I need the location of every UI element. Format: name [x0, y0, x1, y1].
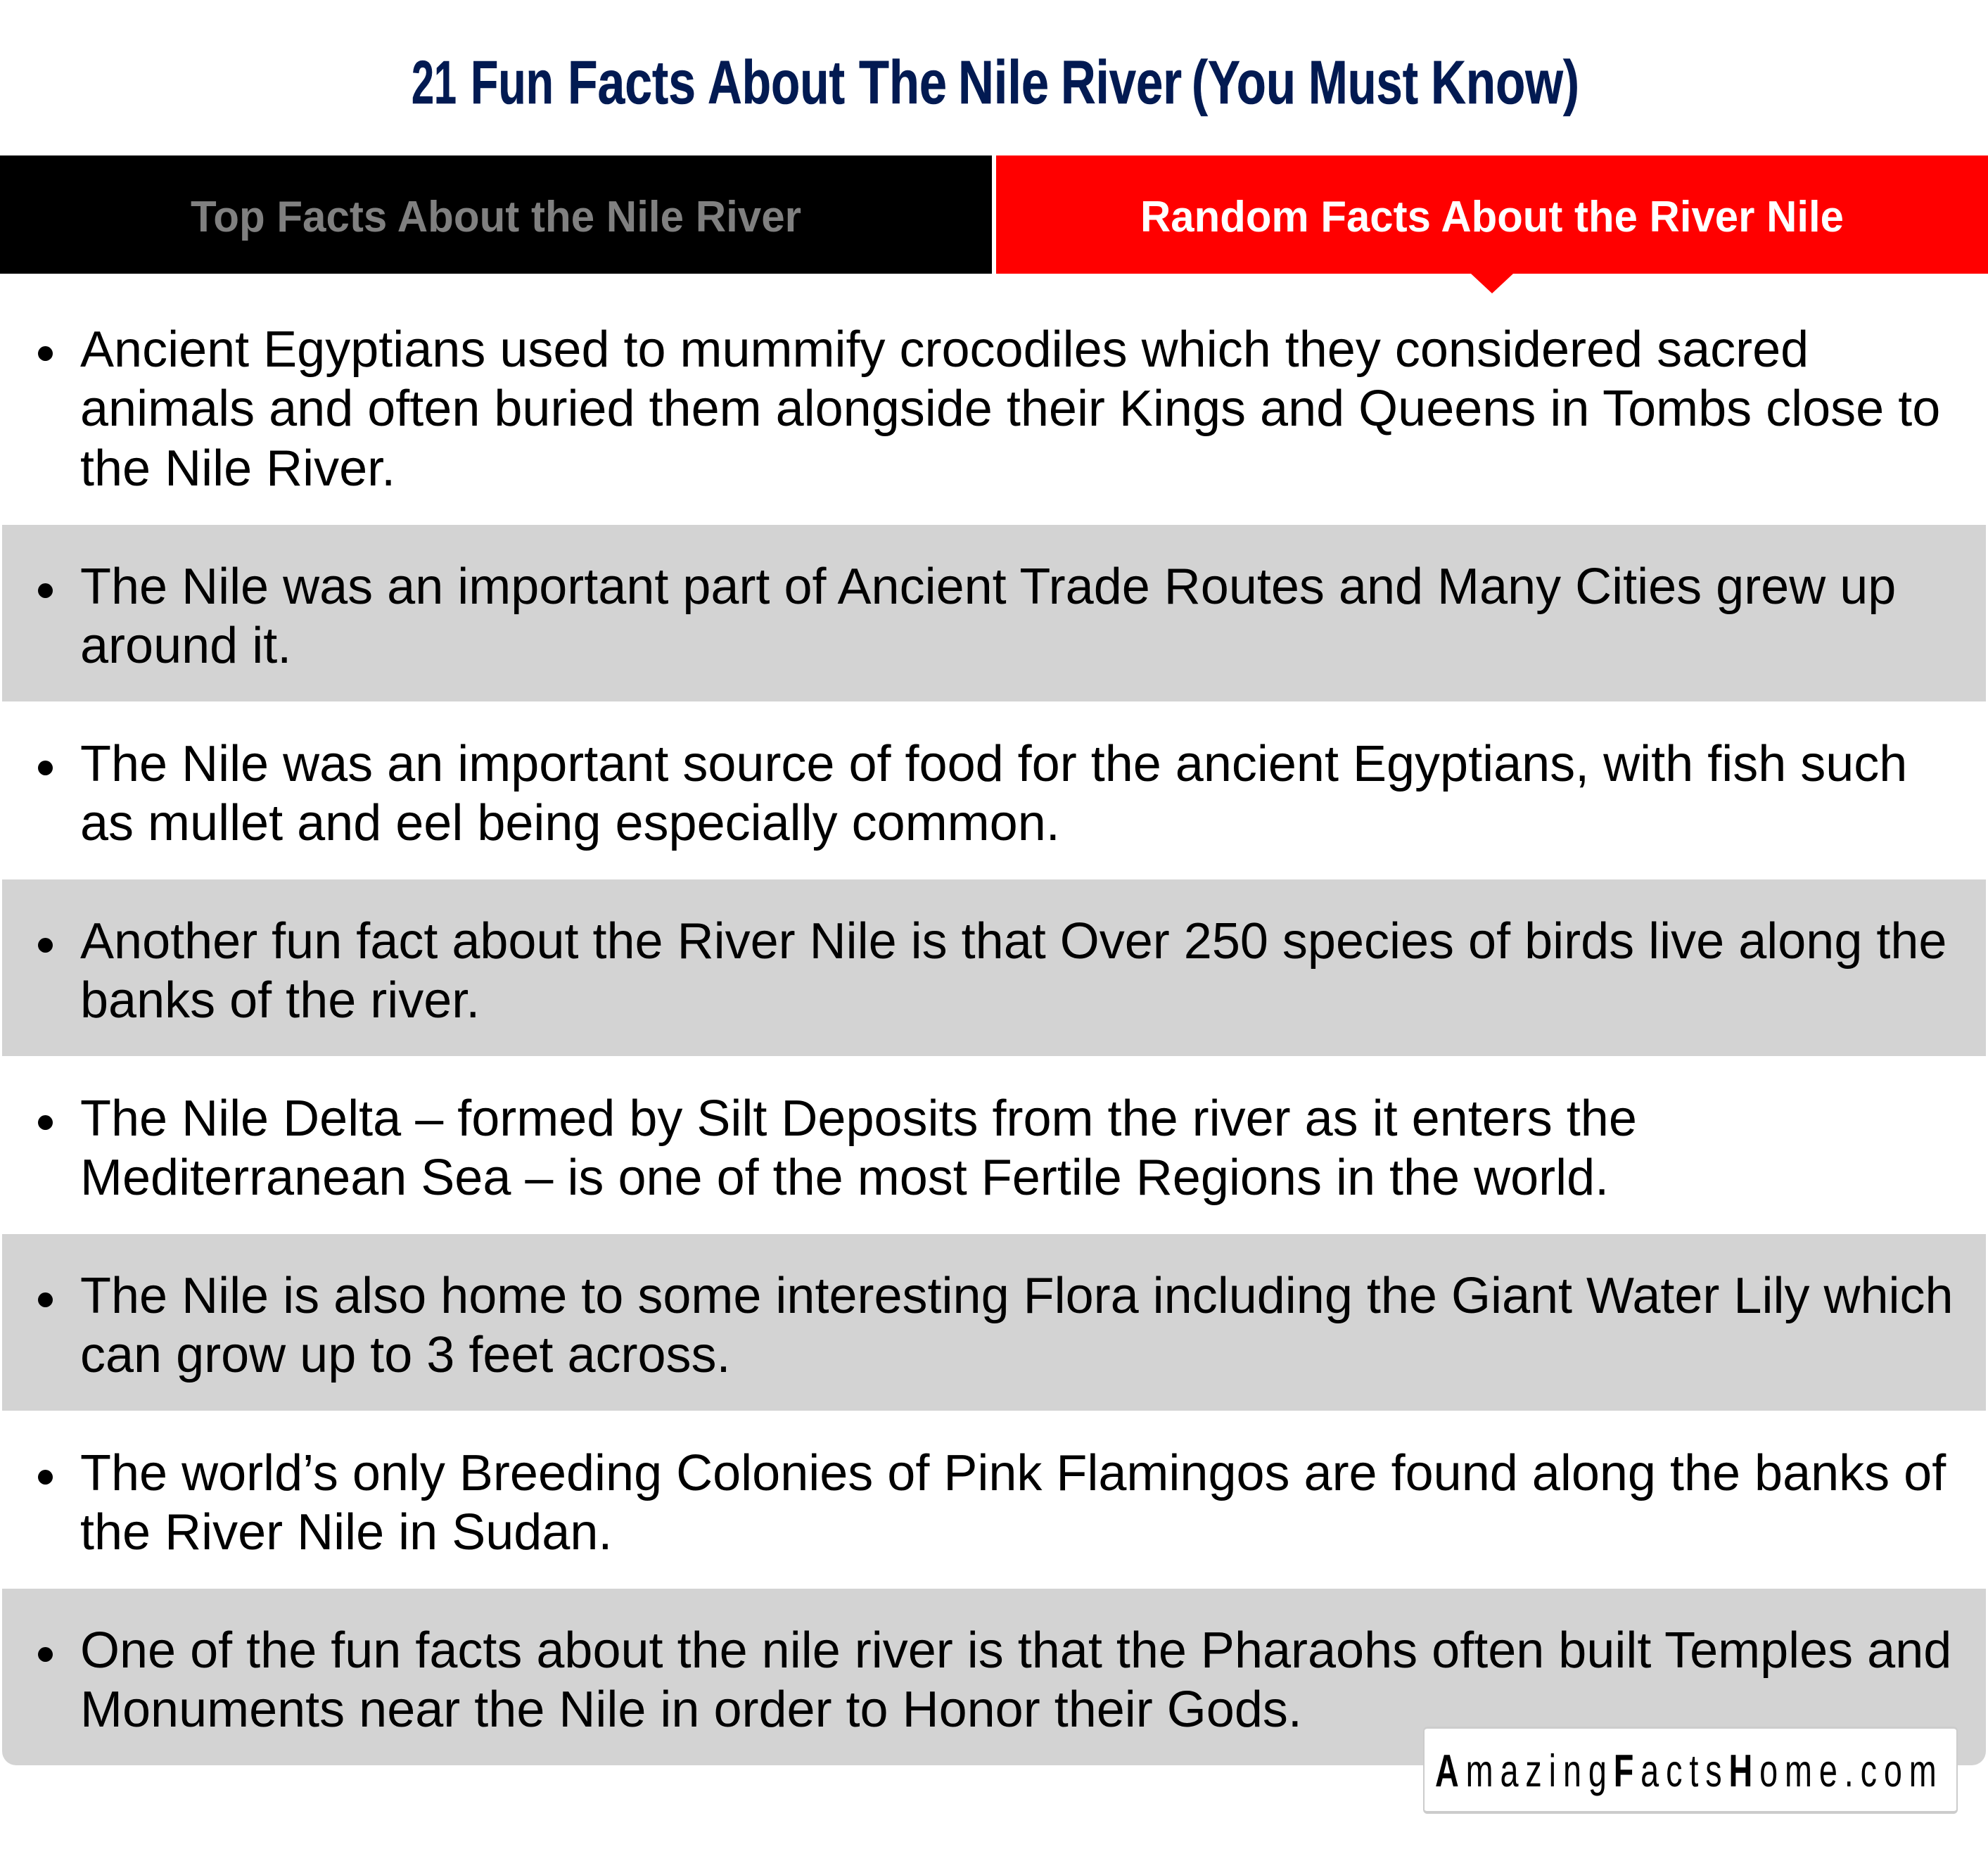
fact 7	[38, 1445, 1946, 1561]
tab: random facts: Random Facts About the River Nile	[1140, 193, 1844, 241]
fact 3: The Nile was an important source of food for the ancient Egyptians, with fish such	[80, 736, 1907, 792]
tab: random facts	[996, 155, 1988, 274]
fact 2: The Nile was an important part of Ancient Trade Routes and Many Cities grew up	[80, 559, 1896, 615]
fact 1: Ancient Egyptians used to mummify crocodiles which they considered sacred	[80, 322, 1809, 378]
title	[412, 49, 1579, 117]
fact 3	[38, 736, 1907, 851]
fact 8	[2, 1589, 1986, 1765]
fact 4	[2, 879, 1986, 1056]
watermark: AmazingFactsHome.com	[1435, 1746, 1937, 1797]
fact 5: The Nile Delta – formed by Silt Deposits from the river as it enters the	[80, 1091, 1637, 1147]
fact 1	[38, 322, 1940, 497]
fact 8: Monuments near the Nile in order to Honor their Gods.	[80, 1682, 1302, 1738]
fact 2: around it.	[80, 618, 291, 674]
fact 1: the Nile River.	[80, 440, 395, 497]
title: The	[859, 49, 947, 117]
fact 6: can grow up to 3 feet across.	[80, 1327, 731, 1383]
active tab pointer	[1471, 274, 1513, 293]
fact 4: banks of the river.	[80, 972, 480, 1029]
title: About	[708, 49, 845, 117]
fact 6: The Nile is also home to some interesting Flora including the Giant Water Lily which	[80, 1268, 1954, 1324]
fact 2	[2, 525, 1986, 701]
title: Must	[1308, 49, 1418, 117]
title: Facts	[568, 49, 696, 117]
fact 3: as mullet and eel being especially common.	[80, 795, 1060, 851]
tab: top facts: Top Facts About the Nile River	[191, 193, 801, 241]
fact 5	[38, 1091, 1637, 1206]
fact 1: animals and often buried them alongside their Kings and Queens in Tombs close to	[80, 381, 1940, 437]
fact 6	[2, 1234, 1986, 1411]
title: River	[1061, 49, 1182, 117]
fact 7: the River Nile in Sudan.	[80, 1504, 612, 1561]
fact 7: The world’s only Breeding Colonies of Pink Flamingos are found along the banks of	[80, 1445, 1946, 1501]
fact 4: Another fun fact about the River Nile is that Over 250 species of birds live along the	[80, 913, 1946, 970]
fact 8: One of the fun facts about the nile river is that the Pharaohs often built Temples and	[80, 1622, 1951, 1679]
title: (You	[1192, 49, 1296, 117]
tab: top facts	[0, 155, 992, 274]
title: 21	[412, 49, 457, 117]
title: Nile	[958, 49, 1049, 117]
fact 5: Mediterranean Sea – is one of the most Fertile Regions in the world.	[80, 1150, 1609, 1206]
title: Know)	[1431, 49, 1579, 117]
watermark	[1423, 1727, 1958, 1814]
title: Fun	[471, 49, 554, 117]
